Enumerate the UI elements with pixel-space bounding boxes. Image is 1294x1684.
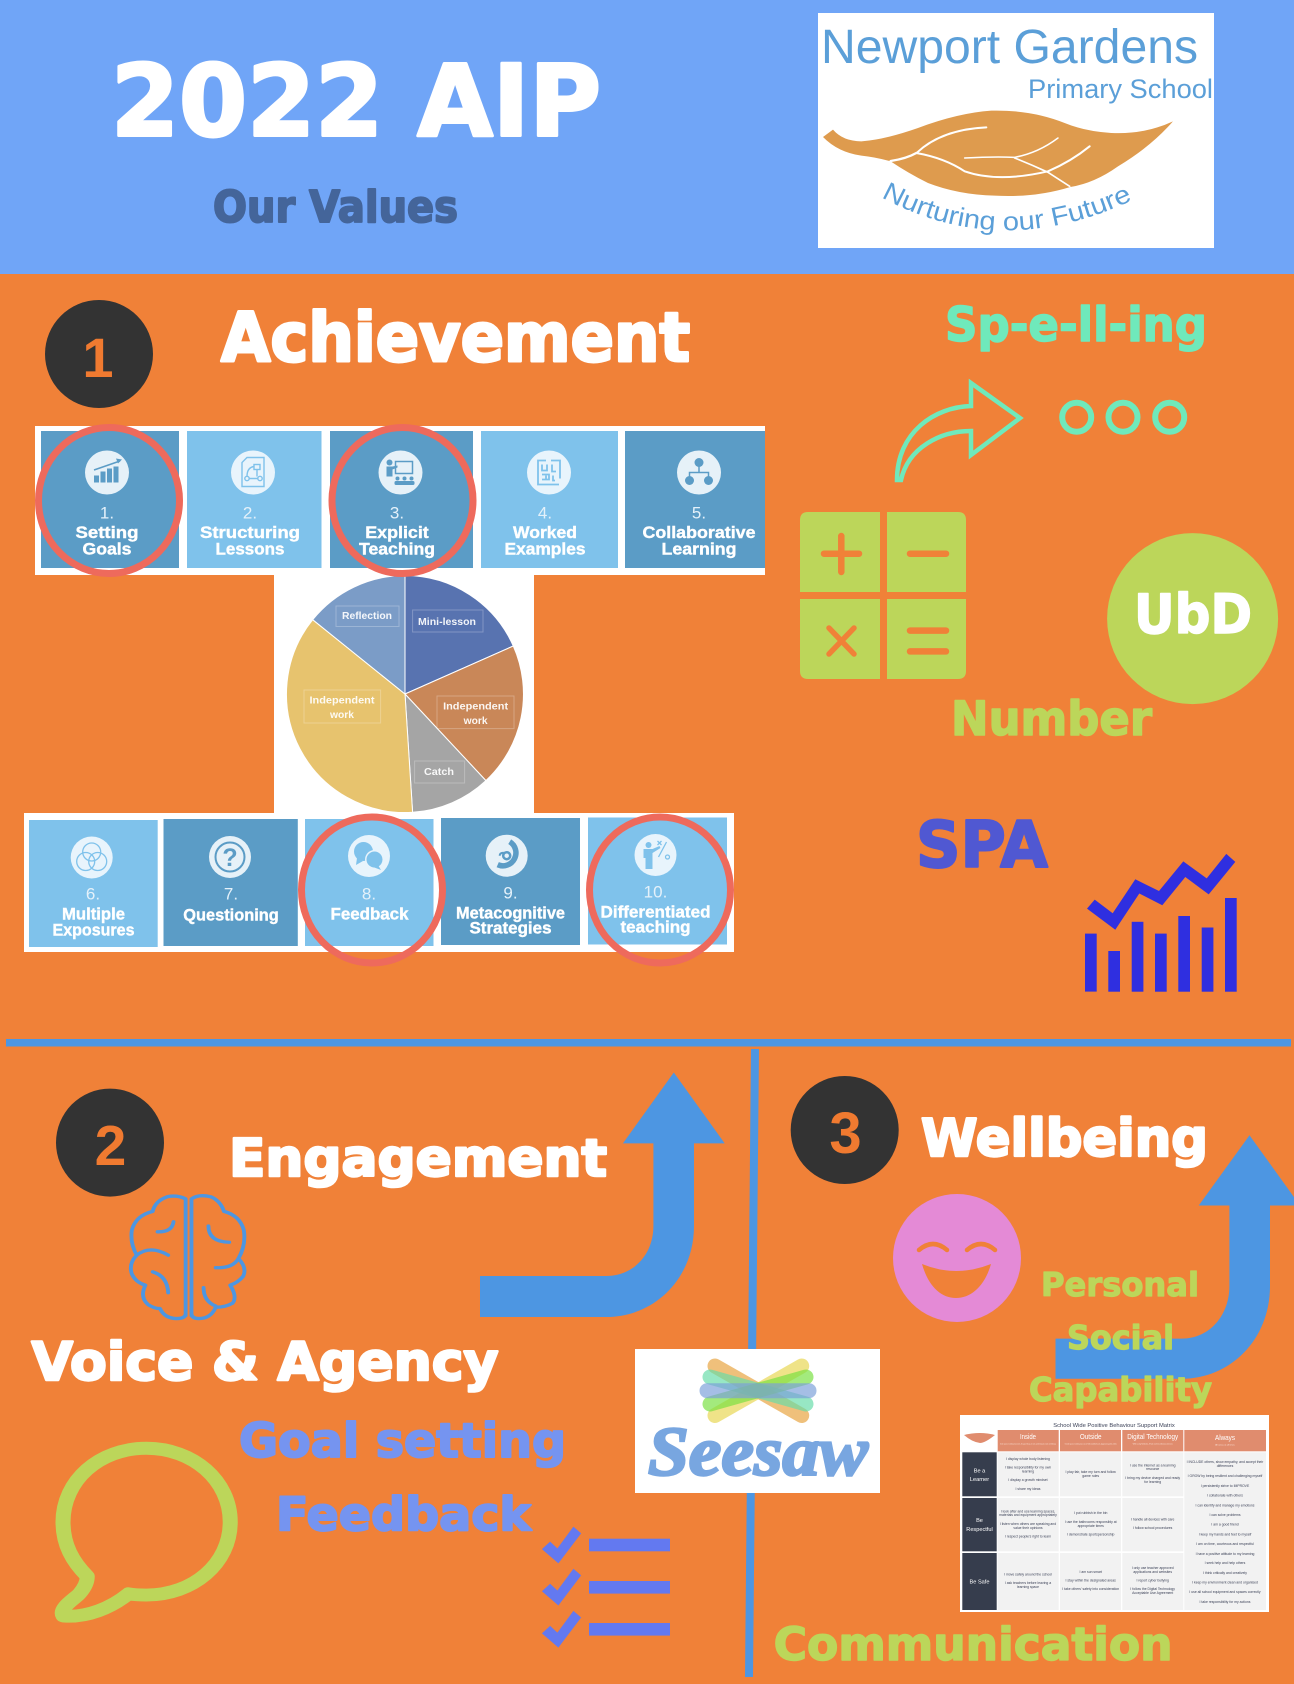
tile 7: questioning: 7. bbox=[224, 884, 238, 904]
tile 3: explicit teaching bbox=[330, 431, 473, 568]
section 2: number badge: 2 bbox=[95, 1114, 126, 1178]
tile 1: setting goals: Goals bbox=[82, 540, 132, 558]
table: behaviour support matrix: I put rubbish in the bin bbox=[1074, 1511, 1107, 1515]
tile 7: questioning: Questioning bbox=[183, 906, 279, 924]
panel: lesson structure pie chart bbox=[274, 575, 534, 813]
panel: lesson structure pie chart: Mini-lesson bbox=[418, 616, 476, 628]
badge: UbD bbox=[1107, 533, 1278, 704]
divider: horizontal bbox=[6, 1039, 1291, 1046]
tile 2: structuring lessons: 2. bbox=[243, 504, 257, 522]
table: behaviour support matrix: differences bbox=[1217, 1464, 1234, 1468]
section 3: number badge: 3 bbox=[829, 1101, 862, 1166]
divider: vertical bbox=[745, 1049, 759, 1677]
tile 5: collaborative learning: Learning bbox=[662, 540, 736, 558]
school logo: Nurturing our Future bbox=[883, 182, 1130, 235]
panel: bottom teaching strategies strip bbox=[24, 813, 734, 952]
table: behaviour support matrix: I ask teachers before leaving a bbox=[1005, 1581, 1051, 1585]
panel: lesson structure pie chart: work bbox=[329, 709, 354, 721]
table: behaviour support matrix: I display a growth mindset bbox=[1008, 1478, 1048, 1482]
tile 2: structuring lessons bbox=[187, 431, 322, 568]
icon: curved arrow bbox=[897, 383, 1020, 480]
icon: speech bubble bbox=[62, 1448, 230, 1616]
tile 4: worked examples: Worked bbox=[513, 523, 577, 542]
icon: calculator operators bbox=[800, 512, 966, 679]
tile 8: feedback: Feedback bbox=[330, 904, 409, 924]
tile 4: worked examples: Examples bbox=[504, 540, 586, 558]
table: behaviour support matrix: I handle all devices with care bbox=[1131, 1517, 1174, 1521]
tile 4: worked examples: 4. bbox=[538, 504, 552, 522]
section 1: number badge: 1 bbox=[82, 326, 114, 389]
tile 10: differentiated teaching: teaching bbox=[620, 918, 690, 936]
table: behaviour support matrix: Respectful bbox=[966, 1527, 993, 1533]
table: behaviour support matrix: I display whole body listening bbox=[1006, 1457, 1050, 1461]
logo: seesaw bbox=[635, 1349, 880, 1493]
table: behaviour support matrix: I use the internet as a learning bbox=[1130, 1463, 1176, 1467]
table: behaviour support matrix: game rules bbox=[1082, 1474, 1099, 1478]
table: behaviour support matrix: Outside spaces including oval, soccer field, basketball court, playground, garden, toilets bbox=[1065, 1442, 1117, 1446]
panel: lesson structure pie chart: Independent bbox=[310, 694, 375, 706]
table: behaviour support matrix: resource bbox=[1146, 1467, 1159, 1471]
table: behaviour support matrix: I play fair, take my turn and follow bbox=[1066, 1470, 1116, 1474]
table: behaviour support matrix: Be a bbox=[974, 1468, 986, 1474]
section 3: number badge bbox=[791, 1076, 899, 1184]
section 1: number badge bbox=[45, 300, 153, 408]
tile 6: multiple exposures: Multiple bbox=[62, 904, 125, 924]
table: behaviour support matrix: I am a good friend bbox=[1211, 1522, 1239, 1526]
table: behaviour support matrix: Digital Technology bbox=[1127, 1432, 1178, 1441]
table: behaviour support matrix bbox=[960, 1415, 1269, 1612]
tile 8: feedback bbox=[305, 819, 434, 946]
table: behaviour support matrix: Be Safe bbox=[970, 1580, 989, 1586]
table: behaviour support matrix: I take others' safety into consideration bbox=[1062, 1587, 1119, 1591]
heading: voice and agency: Voice & Agency bbox=[32, 1332, 499, 1393]
logo: seesaw: Seesaw bbox=[648, 1414, 868, 1491]
tile 6: multiple exposures: 6. bbox=[86, 884, 100, 904]
table: behaviour support matrix: I can solve problems bbox=[1209, 1513, 1241, 1517]
table: behaviour support matrix: I GROW by being resilient and challenging myself bbox=[1188, 1474, 1262, 1478]
label: personal social capability bbox=[1029, 1265, 1212, 1409]
table: behaviour support matrix: learning space bbox=[1017, 1585, 1039, 1589]
table: behaviour support matrix: I demonstrate sportspersonship bbox=[1067, 1532, 1115, 1536]
panel: top teaching strategies strip bbox=[35, 426, 765, 575]
label: SPA: SPA bbox=[916, 809, 1048, 883]
table: behaviour support matrix: I can identify and manage my emotions bbox=[1196, 1503, 1255, 1507]
tile 10: differentiated teaching bbox=[588, 818, 727, 944]
tile 5: collaborative learning: 5. bbox=[692, 504, 706, 522]
table: behaviour support matrix: While using Netbooks, iPads and miscellaneous devices bbox=[1133, 1442, 1173, 1446]
table: behaviour support matrix: Be bbox=[976, 1518, 983, 1524]
heading: wellbeing: Wellbeing bbox=[921, 1109, 1208, 1169]
table: behaviour support matrix: I listen when others are speaking and bbox=[1000, 1522, 1056, 1526]
heading: engagement: Engagement bbox=[229, 1129, 607, 1189]
icon: brain bbox=[131, 1196, 245, 1319]
tile 7: questioning: ? bbox=[222, 844, 238, 872]
tile 6: multiple exposures bbox=[29, 820, 158, 947]
table: behaviour support matrix: for learning bbox=[1144, 1480, 1161, 1484]
table: behaviour support matrix: I use the bathrooms responsibly at bbox=[1065, 1520, 1117, 1524]
table: behaviour support matrix: I keep my environment clean and organised bbox=[1192, 1580, 1258, 1584]
table: behaviour support matrix: I seek help and help others bbox=[1205, 1561, 1246, 1565]
arrow: engagement up-turn bbox=[480, 1072, 725, 1317]
table: behaviour support matrix: learning bbox=[1022, 1469, 1034, 1473]
section 2: number badge bbox=[56, 1089, 164, 1197]
table: behaviour support matrix: value their opinions bbox=[1013, 1526, 1043, 1530]
tile 1: setting goals bbox=[41, 431, 179, 568]
tile 9: metacognitive strategies: Strategies bbox=[470, 918, 552, 938]
tile 2: structuring lessons: Structuring bbox=[200, 523, 300, 542]
table: behaviour support matrix: I think critically and creatively bbox=[1203, 1571, 1247, 1575]
icon: checklist bbox=[542, 1527, 670, 1648]
tile 3: explicit teaching: Teaching bbox=[359, 540, 435, 558]
table: behaviour support matrix: Inside spaces including classrooms, the gym, library, art room, performing arts room and hallways bbox=[1000, 1442, 1057, 1446]
tile 1: setting goals: 1. bbox=[100, 504, 114, 522]
table: behaviour support matrix: I am on time, courteous and respectful bbox=[1196, 1542, 1254, 1546]
table: behaviour support matrix: Inside bbox=[1020, 1432, 1036, 1441]
table: behaviour support matrix: I stay within the designated areas bbox=[1066, 1578, 1116, 1582]
highlight rings on selected strategies bbox=[38, 428, 730, 963]
tile 8: feedback: 8. bbox=[362, 884, 376, 904]
heading: achievement: Achievement bbox=[221, 299, 690, 378]
tile 5: collaborative learning: Collaborative bbox=[642, 523, 756, 542]
icon: smiley face bbox=[893, 1194, 1021, 1322]
table: behaviour support matrix: I am sun smart bbox=[1079, 1570, 1102, 1574]
panel: lesson structure pie chart: Catch bbox=[424, 766, 454, 778]
table: behaviour support matrix: materials and equipment appropriately bbox=[999, 1513, 1057, 1517]
tile 10: differentiated teaching: 10. bbox=[644, 882, 667, 902]
badge: UbD: UbD bbox=[1134, 583, 1252, 646]
tile 4: worked examples bbox=[481, 431, 618, 568]
tile 5: collaborative learning bbox=[625, 431, 765, 568]
table: behaviour support matrix: I INCLUDE others, show empathy, and accept their bbox=[1187, 1460, 1264, 1464]
tile 3: explicit teaching: Explicit bbox=[365, 523, 429, 542]
table: behaviour support matrix: appropriate times bbox=[1078, 1524, 1104, 1528]
table: behaviour support matrix: I collaborate with others bbox=[1207, 1493, 1243, 1497]
table: behaviour support matrix: I bring my device charged and ready bbox=[1125, 1476, 1180, 1480]
tile 2: structuring lessons: Lessons bbox=[216, 540, 284, 558]
table: behaviour support matrix: I respect people's right to learn bbox=[1005, 1534, 1051, 1538]
table: behaviour support matrix: Always bbox=[1215, 1433, 1235, 1442]
table: behaviour support matrix: Acceptable Use Agreement bbox=[1132, 1591, 1173, 1595]
table: behaviour support matrix: I move safely around the school bbox=[1004, 1572, 1052, 1576]
label: personal social capability: Social bbox=[1067, 1318, 1174, 1357]
table: behaviour support matrix: Learner bbox=[970, 1477, 989, 1483]
icon: bar and line chart bbox=[1085, 854, 1237, 992]
tile 9: metacognitive strategies: Metacognitive bbox=[456, 904, 565, 922]
school logo: Newport Gardens bbox=[821, 21, 1198, 74]
label: personal social capability: Capability bbox=[1029, 1370, 1212, 1409]
table: behaviour support matrix: I only use teacher approved bbox=[1132, 1566, 1174, 1570]
table: behaviour support matrix: I keep my hands and feet to myself bbox=[1199, 1532, 1251, 1536]
panel: lesson structure pie chart: Independent bbox=[443, 700, 509, 712]
table: behaviour support matrix: I follow the Digital Technology bbox=[1130, 1587, 1175, 1591]
school logo: Primary School bbox=[1028, 74, 1213, 104]
label: goal setting: Goal setting bbox=[239, 1414, 566, 1469]
school logo bbox=[818, 13, 1214, 248]
table: behaviour support matrix: Outside bbox=[1080, 1432, 1102, 1441]
label: personal social capability: Personal bbox=[1041, 1265, 1199, 1304]
tile 3: explicit teaching: 3. bbox=[390, 504, 404, 522]
table: behaviour support matrix: I follow school procedures bbox=[1133, 1526, 1173, 1530]
tile 7: questioning bbox=[164, 819, 298, 946]
icon: three circles bbox=[1062, 403, 1184, 432]
label: number: Number bbox=[951, 692, 1153, 747]
table: behaviour support matrix: I use all school equipment and spaces correctly bbox=[1189, 1590, 1261, 1594]
label: feedback: Feedback bbox=[276, 1488, 532, 1542]
label: communication: Communication bbox=[774, 1618, 1173, 1671]
title: 2022 AIP bbox=[111, 44, 601, 160]
table: behaviour support matrix: All areas at all times bbox=[1215, 1444, 1236, 1446]
table: behaviour support matrix: I report cyber bullying bbox=[1136, 1578, 1169, 1582]
table: behaviour support matrix: I have a positive attitude to my learning bbox=[1196, 1552, 1255, 1556]
panel: lesson structure pie chart: work bbox=[463, 715, 488, 727]
tile 9: metacognitive strategies bbox=[441, 818, 580, 945]
arrow: wellbeing up-turn bbox=[1056, 1135, 1294, 1379]
table: behaviour support matrix: I take responsibility for my own bbox=[1005, 1465, 1051, 1469]
table: behaviour support matrix: applications and websites bbox=[1133, 1570, 1172, 1574]
label: spelling: Sp-e-ll-ing bbox=[945, 298, 1207, 353]
subtitle: our values: Our Values bbox=[213, 182, 458, 233]
table: behaviour support matrix: I persistently strive to IMPROVE bbox=[1201, 1484, 1250, 1488]
tile 9: metacognitive strategies: 9. bbox=[503, 884, 518, 902]
tile 10: differentiated teaching: Differentiated bbox=[600, 902, 710, 922]
table: behaviour support matrix: I take responsibility for my actions bbox=[1200, 1600, 1251, 1604]
table: behaviour support matrix: School Wide Positive Behaviour Support Matrix bbox=[1053, 1423, 1175, 1429]
table: behaviour support matrix: I look after and use learning spaces, bbox=[1001, 1509, 1055, 1513]
panel: lesson structure pie chart: Reflection bbox=[342, 610, 392, 622]
table: behaviour support matrix: I share my ideas bbox=[1016, 1487, 1041, 1491]
tile 6: multiple exposures: Exposures bbox=[52, 920, 134, 940]
tile 1: setting goals: Setting bbox=[76, 523, 138, 542]
header band bbox=[0, 0, 1294, 274]
